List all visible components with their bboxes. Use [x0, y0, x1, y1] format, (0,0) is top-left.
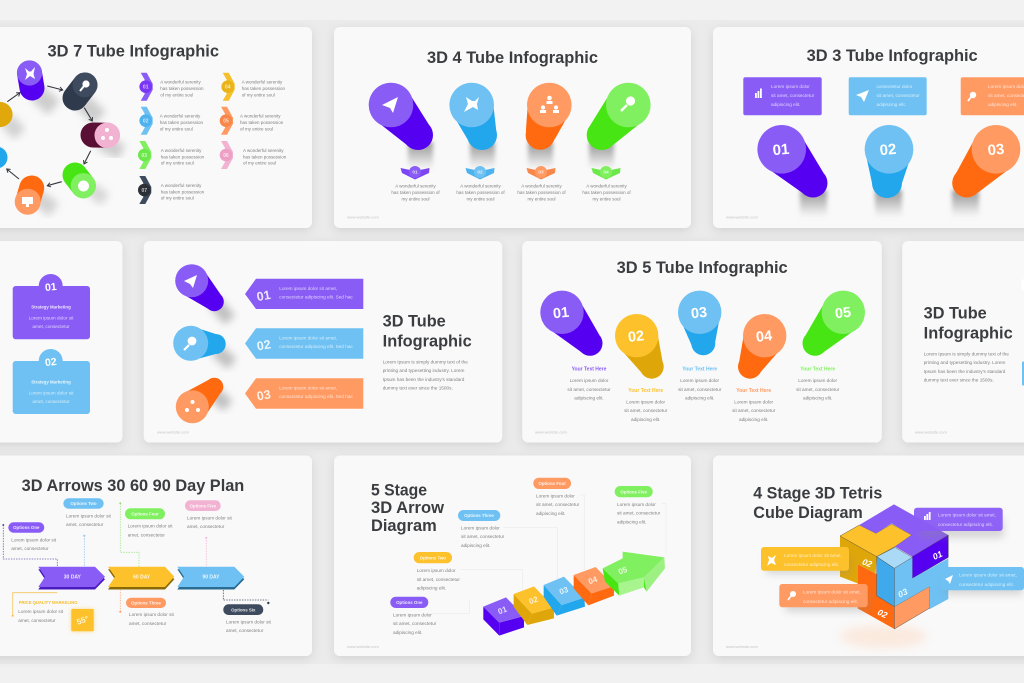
heading: Cube Diagram	[753, 504, 863, 522]
tube 04: 04	[755, 328, 773, 346]
label 04: Your Text Here	[736, 388, 771, 394]
item 05: has taken possession	[240, 120, 284, 125]
card 02	[13, 349, 90, 414]
tube 02: 02	[879, 141, 897, 159]
text 04: my entire soul	[592, 196, 621, 201]
body text: Ipsum has been the industry's standard	[383, 377, 465, 382]
item 06: has taken possession	[243, 154, 287, 159]
item 04: of my entire soul	[242, 92, 275, 97]
block 02	[514, 586, 554, 625]
label 05: Lorem ipsum dolor	[798, 378, 838, 383]
label 02: adipiscing elit.	[631, 417, 660, 422]
label 04	[732, 388, 776, 422]
item 01: has taken possession	[160, 86, 204, 91]
option one: Options One	[13, 525, 40, 530]
option four: Options Four	[131, 512, 159, 516]
option four: Lorem ipsum dolor	[536, 494, 575, 498]
blue piece	[877, 547, 948, 609]
option three: sit amet, consectetur	[461, 534, 505, 539]
arrow 05	[603, 552, 665, 596]
label 05: sit amet, consectetur	[796, 387, 840, 392]
option two: adipiscing elit.	[417, 586, 446, 590]
tube 01	[757, 125, 828, 218]
arrow label 01: consectetur adipiscing elit. Sed hac	[279, 295, 353, 300]
label 03: Your Text Here	[682, 367, 717, 373]
panel: 3D Tube Infographic cropped	[902, 241, 1024, 442]
arrow 90 day: 90 DAY	[202, 574, 220, 580]
option five: Options Five	[190, 503, 217, 508]
label 01: sit amet, consectetur	[567, 387, 611, 392]
text 02: has taken possession of	[456, 190, 505, 195]
block 01	[483, 597, 524, 636]
item 07: A wonderful serenity	[161, 183, 202, 188]
item 06: A wonderful serenity	[243, 148, 284, 153]
text 03: my entire soul	[527, 196, 556, 201]
tetris cube	[840, 504, 948, 648]
badge 04	[592, 166, 620, 180]
card 02: amet, consectetur	[32, 399, 70, 404]
dashed connectors	[2, 502, 269, 617]
tube 03	[952, 125, 1020, 218]
option one: sit amet, consectetur	[393, 621, 437, 626]
item 07	[138, 176, 205, 204]
tube purple	[175, 264, 230, 320]
panel: 3D Tube Infographic with arrows	[144, 241, 502, 442]
option three: amet, consectetur	[129, 621, 167, 626]
title: 3D 7 Tube Infographic	[48, 42, 219, 60]
panel: 3D Arrows 30 60 90 Day Plan	[0, 456, 312, 656]
label 04: adipiscing elit.	[739, 417, 768, 422]
option five	[615, 486, 661, 524]
card 3: adipiscing elit.	[988, 102, 1017, 107]
item 04: A wonderful serenity	[242, 80, 283, 85]
tube 05	[802, 291, 865, 356]
tube 01: 01	[772, 141, 790, 159]
heading: Infographic	[924, 324, 1013, 342]
item 02: A wonderful serenity	[160, 114, 201, 119]
block 02: 02	[528, 595, 540, 606]
panel: 5 Stage 3D Arrow Diagram	[334, 456, 691, 656]
arrow 60 day: 60 DAY	[133, 574, 151, 580]
cube labels: 02	[861, 557, 874, 569]
yellow square	[71, 609, 94, 631]
item 03: A wonderful serenity	[161, 148, 202, 153]
orange tube	[526, 83, 572, 170]
tube ring	[0, 60, 122, 215]
blue tube	[449, 83, 497, 170]
item 03: of my entire soul	[161, 161, 194, 166]
item 03: has taken possession	[161, 154, 205, 159]
item 05: A wonderful serenity	[240, 114, 281, 119]
item 06: of my entire soul	[243, 161, 276, 166]
footer: www.website.com	[347, 644, 379, 649]
heading: 3D Tube	[924, 304, 987, 322]
label 03	[678, 367, 722, 401]
tube 04	[738, 314, 786, 379]
card 3	[961, 77, 1024, 115]
yellow square: 55°	[75, 614, 90, 627]
badge 03: 03	[538, 170, 544, 176]
card 01: amet, consectetur	[32, 324, 70, 329]
body text: Lorem Ipsum is simply dummy text of the	[924, 352, 1009, 356]
badge 02: 02	[477, 170, 483, 176]
item 01: A wonderful serenity	[160, 80, 201, 85]
card 01: 01	[44, 281, 57, 294]
label 01	[567, 367, 611, 401]
item 04: 04	[225, 84, 231, 90]
text 01: A wonderful serenity	[395, 184, 437, 188]
option three	[126, 598, 175, 626]
footer: www.website.com	[726, 214, 758, 220]
arrow label 03: 03	[256, 387, 272, 404]
option two	[414, 552, 460, 590]
option two: Lorem ipsum dolor	[417, 568, 456, 573]
text 01: has taken possession of	[391, 190, 440, 195]
body text: printing and typesetting industry. Lorem	[383, 368, 465, 373]
body text: printing and typesetting industry. Lorem	[924, 360, 1006, 365]
tube 02	[615, 314, 664, 379]
tube 03	[678, 291, 721, 355]
panel: 3D 7 Tube Infographic	[0, 27, 312, 228]
badge 02	[466, 166, 494, 180]
card 1: adipiscing elit.	[771, 102, 800, 107]
card 01: Strategy Marketing	[31, 304, 71, 310]
card 01: Lorem ipsum dolor sit	[29, 316, 74, 320]
arrow label 01	[245, 279, 363, 309]
card yellow: Lorem ipsum dolor sit amet,	[784, 553, 842, 558]
card orange	[779, 584, 869, 612]
option one: Lorem ipsum dolor sit	[11, 538, 57, 542]
arrow 30 day: 30 DAY	[64, 574, 81, 580]
card purple: consectetur adipiscing elit.	[938, 522, 993, 527]
arrow label 02: consectetur adipiscing elit. Sed hac	[279, 344, 353, 349]
panel: 3D 4 Tube Infographic	[334, 27, 691, 228]
card purple: Lorem ipsum dolor sit amet,	[938, 512, 996, 518]
tube 02	[865, 125, 913, 218]
tube 05: 05	[834, 305, 852, 322]
arrow label 03: Lorem ipsum dolor sit amet,	[279, 386, 337, 390]
price quality	[18, 600, 77, 623]
heading: 5 Stage	[371, 481, 427, 499]
badge 01	[400, 166, 430, 180]
heading: Infographic	[383, 332, 472, 350]
arrow 60 day	[108, 567, 174, 590]
label 03: sit amet, consectetur	[678, 387, 722, 392]
footer: www.website.com	[157, 430, 189, 434]
arrow label 02: 02	[256, 337, 272, 354]
label 02: sit amet, consectetur	[624, 408, 668, 413]
body text: dummy text ever since the 1500s.	[924, 378, 994, 383]
option one: adipiscing elit.	[393, 630, 422, 635]
item 07: has taken possession	[161, 189, 205, 194]
block 04: 04	[587, 575, 599, 586]
item 01	[139, 73, 204, 101]
orange piece	[858, 564, 929, 629]
block arrow	[483, 552, 665, 636]
title: 3D Arrows 30 60 90 Day Plan	[22, 477, 244, 495]
arrow label 01: 01	[256, 288, 272, 304]
item 01: 01	[143, 84, 149, 90]
option three: Options Three	[464, 513, 494, 518]
price quality: Lorem ipsum dolor sit	[18, 609, 64, 614]
option one: Lorem ipsum dolor	[393, 612, 432, 618]
arrow label 01: Lorem ipsum dolor sit amet,	[279, 286, 337, 291]
item 07: 07	[142, 188, 147, 194]
item 03: 03	[142, 153, 147, 159]
card 1: sit amet, consectetur	[771, 93, 815, 98]
block 04	[574, 567, 614, 605]
tube 01: 01	[552, 305, 570, 322]
body text: dummy text ever since the 1500s.	[383, 386, 453, 391]
title: 3D 3 Tube Infographic	[807, 47, 978, 65]
text 02: A wonderful serenity	[460, 184, 502, 188]
text 04: has taken possession of	[582, 190, 631, 195]
card 1	[743, 77, 822, 115]
yellow piece	[840, 524, 912, 583]
label 05: adipiscing elit.	[803, 396, 832, 401]
card purple	[914, 508, 1004, 538]
item 04	[221, 73, 285, 101]
item 05: 05	[223, 118, 229, 124]
option five: Lorem ipsum dolor	[617, 502, 656, 507]
cropped card	[1022, 362, 1024, 386]
text 03: has taken possession of	[517, 190, 566, 195]
item 02: of my entire soul	[160, 126, 193, 131]
item 03	[138, 141, 205, 169]
option two: Options Two	[70, 501, 97, 506]
label 04: sit amet, consectetur	[732, 408, 776, 413]
option six: Options Six	[231, 607, 256, 612]
card 2: adipiscing elit.	[876, 102, 906, 107]
option three: Options Three	[131, 600, 161, 606]
label 02: Your Text Here	[628, 388, 663, 394]
option four: Options Four	[538, 481, 566, 486]
card yellow: consectetur adipiscing elit.	[784, 562, 839, 567]
cube labels	[861, 549, 944, 620]
footer: www.website.com	[915, 430, 947, 434]
card 2: sit amet, consectetur	[876, 93, 920, 98]
item 04: has taken possession	[242, 86, 285, 91]
footer: www.website.com	[726, 644, 758, 649]
panel: 4 Stage 3D Tetris Cube Diagram	[713, 456, 1024, 656]
card 02: 02	[44, 356, 57, 369]
label 03: Lorem ipsum dolor	[680, 378, 720, 383]
item 02: 02	[143, 118, 149, 124]
item 02: has taken possession	[160, 120, 203, 125]
block 01: 01	[497, 605, 509, 616]
price quality: amet, consectetur	[18, 618, 56, 623]
heading: Diagram	[371, 517, 437, 535]
block 03: 03	[558, 585, 570, 597]
option four	[533, 478, 580, 516]
option five	[185, 500, 233, 529]
option four	[125, 508, 173, 538]
purple tube	[369, 83, 433, 170]
text 01: my entire soul	[401, 196, 430, 201]
tube blue	[173, 326, 232, 364]
cropped circle	[1021, 276, 1024, 294]
option one	[390, 597, 437, 635]
option four: Lorem ipsum dolor sit	[128, 524, 173, 528]
option one: Options One	[396, 600, 423, 605]
ring arrows	[7, 86, 92, 186]
option four: amet, consectetur	[128, 532, 165, 538]
tube orange	[176, 378, 228, 423]
card blue: Lorem ipsum dolor sit amet,	[959, 572, 1017, 578]
option three	[458, 510, 505, 548]
cube labels: 03	[896, 586, 909, 600]
tube 03: 03	[987, 141, 1005, 159]
label 03: adipiscing elit.	[685, 396, 714, 401]
card 02: Strategy Marketing	[31, 380, 71, 384]
heading: 3D Tube	[383, 312, 446, 330]
option three: adipiscing elit.	[461, 543, 490, 548]
option one	[8, 522, 57, 551]
option four: adipiscing elit.	[536, 511, 565, 516]
card 01	[13, 274, 90, 339]
label 01: Lorem ipsum dolor	[570, 378, 609, 383]
item 05: of my entire soul	[240, 126, 273, 131]
item 01: of my entire soul	[160, 92, 193, 97]
card 1: Lorem ipsum dolor	[771, 84, 810, 89]
option three: Lorem ipsum dolor sit	[129, 612, 175, 617]
option four: sit amet, consectetur	[536, 502, 580, 507]
badge 01: 01	[412, 170, 418, 176]
cube labels: 01	[931, 549, 944, 562]
arrow 90 day	[177, 567, 244, 590]
option two: Options Two	[420, 555, 446, 560]
faint connectors	[430, 495, 666, 613]
arrow label 03	[245, 378, 363, 409]
label 01: adipiscing elit.	[574, 396, 604, 401]
option two: amet, consectetur	[66, 522, 104, 527]
panel: 3D 5 Tube Infographic	[522, 241, 882, 442]
text 03: A wonderful serenity	[521, 184, 563, 188]
cube labels: 02	[876, 607, 889, 620]
footer: www.website.com	[347, 214, 379, 220]
label 04: Lorem ipsum dolor	[734, 400, 774, 404]
purple piece	[859, 504, 948, 578]
green tube	[587, 83, 651, 170]
option five: amet, consectetur	[187, 524, 225, 529]
arrow 05: 05	[617, 565, 629, 577]
title: 3D 4 Tube Infographic	[427, 49, 598, 67]
panel: 3D 3 Tube Infographic	[713, 27, 1024, 228]
label 02: Lorem ipsum dolor	[626, 400, 666, 404]
badge 03	[526, 166, 556, 180]
card 2	[849, 77, 927, 115]
tube 02: 02	[627, 328, 645, 346]
option five: Options Five	[620, 489, 648, 494]
text 04: A wonderful serenity	[586, 184, 628, 188]
tube 03: 03	[690, 305, 708, 322]
option one: amet, consectetur	[11, 546, 49, 551]
arrow label 02: Lorem ipsum dolor sit amet,	[279, 336, 337, 340]
card orange: consectetur adipiscing elit.	[803, 599, 858, 604]
item 05	[220, 107, 284, 135]
card yellow	[761, 547, 850, 574]
label 02	[624, 388, 668, 422]
arrow label 02	[245, 328, 363, 359]
body text: Lorem Ipsum is simply dummy text of the	[383, 360, 468, 364]
card orange: Lorem ipsum dolor sit amet,	[803, 590, 861, 594]
item 07: of my entire soul	[161, 196, 194, 201]
body text: Ipsum has been the industry's standard	[924, 369, 1006, 374]
arrow 30 day	[38, 567, 105, 590]
option six: Lorem ipsum dolor sit	[226, 620, 272, 624]
badge 04: 04	[603, 170, 609, 176]
card blue	[941, 567, 1024, 595]
item 02	[139, 107, 203, 135]
option two: sit amet, consectetur	[417, 577, 460, 582]
option five: Lorem ipsum dolor sit	[187, 516, 233, 520]
item 06	[220, 141, 287, 169]
option five: sit amet, consectetur	[617, 510, 661, 516]
title: 3D 5 Tube Infographic	[617, 259, 788, 277]
heading: 4 Stage 3D Tetris	[753, 484, 882, 502]
arrow label 03: consectetur adipiscing elit. Sed hac	[279, 394, 353, 399]
label 01: Your Text Here	[572, 367, 607, 373]
tube 01	[540, 291, 602, 356]
option six: amet, consectetur	[226, 628, 264, 633]
option five: adipiscing elit.	[617, 520, 646, 524]
block 03	[544, 577, 585, 616]
option six	[223, 604, 272, 633]
label 05	[796, 367, 840, 401]
footer: www.website.com	[535, 430, 567, 434]
text 02: my entire soul	[466, 196, 495, 201]
option two	[63, 498, 112, 527]
label 05: Your Text Here	[800, 367, 835, 373]
heading: 3D Arrow	[371, 499, 444, 517]
price quality: PRICE QUALITY MARKELING	[19, 600, 77, 605]
item 06: 06	[223, 153, 229, 159]
option two: Lorem ipsum dolor sit	[66, 514, 112, 518]
card 2: consectetur dolor	[876, 84, 913, 89]
option three: Lorem ipsum dolor	[461, 526, 500, 530]
panel: Marketing cards	[0, 241, 122, 442]
card blue: consectetur adipiscing elit.	[959, 582, 1014, 587]
card 02: Lorem ipsum dolor sit	[29, 390, 74, 396]
